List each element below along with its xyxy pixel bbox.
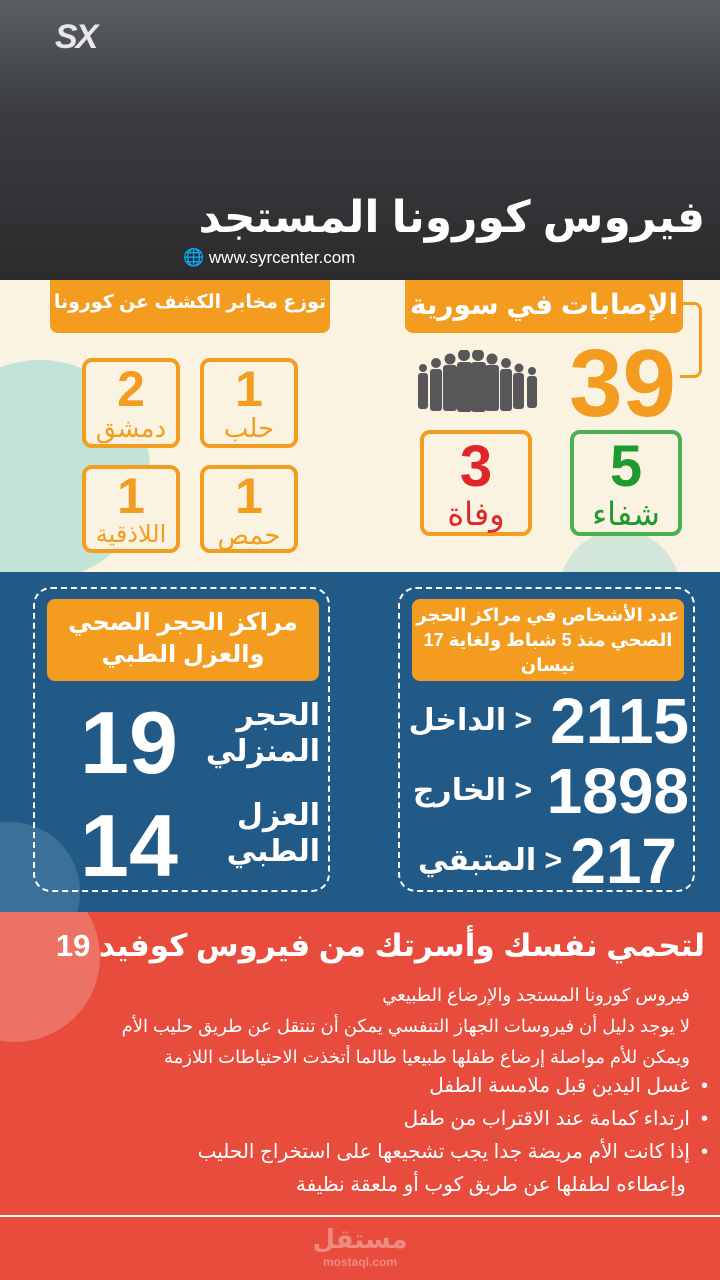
- row outside: [413, 755, 689, 827]
- box: latakia: اللاذقية: [96, 521, 166, 548]
- heading: الصحي منذ 5 شباط ولغاية 17: [424, 630, 672, 650]
- box: damascus: دمشق: [96, 413, 166, 443]
- bullet list: وإعطاءه لطفلها عن طريق كوب أو ملعقة نظيفة: [296, 1174, 686, 1196]
- bullet list: [198, 1075, 708, 1196]
- box: aleppo: [200, 358, 298, 448]
- medical isolation: 14: [80, 796, 178, 895]
- row outside: 1898: [547, 755, 689, 827]
- text block: ويمكن للأم مواصلة إرضاع طفلها طبيعيا طالما أتخذت الاحتياطات اللازمة: [164, 1047, 690, 1067]
- panel: quarantine centers: [33, 587, 330, 892]
- logo: SX: [55, 18, 96, 56]
- box: deaths: [420, 430, 532, 536]
- heading: لتحمي نفسك وأسرتك من فيروس كوفيد 19: [56, 928, 705, 963]
- virus decoration: [0, 822, 80, 962]
- box: recovered: [570, 430, 682, 536]
- bracket line: [680, 302, 702, 378]
- heading: [47, 599, 319, 681]
- box: deaths: 3: [460, 434, 492, 499]
- divider: [0, 1215, 720, 1217]
- panel: quarantine blue: [0, 572, 720, 912]
- heading: infections: [405, 280, 683, 333]
- box: recovered: شفاء: [592, 496, 660, 532]
- watermark: مستقل: [312, 1224, 408, 1254]
- box: deaths: وفاة: [447, 496, 505, 532]
- medical isolation: الطبي: [227, 835, 320, 868]
- heading: والعزل الطبي: [102, 641, 264, 668]
- box: latakia: 1: [117, 468, 145, 524]
- panel: protection tips: [0, 912, 720, 1280]
- heading: [412, 599, 684, 681]
- text block: لا يوجد دليل أن فيروسات الجهاز التنفسي يمكن أن تنتقل عن طريق حليب الأم: [122, 1016, 690, 1036]
- bullet list: • إذا كانت الأم مريضة جدا يجب تشجيعها على استخراج الحليب: [198, 1141, 708, 1163]
- home quarantine: [80, 693, 320, 792]
- row inside: < الداخل: [409, 704, 532, 737]
- row remaining: [418, 825, 677, 897]
- header photo: [0, 0, 720, 280]
- row remaining: 217: [570, 825, 677, 897]
- icon: people: [418, 350, 537, 412]
- watermark: [312, 1224, 408, 1269]
- box: aleppo: حلب: [224, 413, 274, 443]
- home quarantine: المنزلي: [206, 735, 320, 768]
- bullet list: • ارتداء كمامة عند الاقتراب من طفل: [404, 1108, 708, 1130]
- row inside: 2115: [550, 685, 689, 757]
- virus decoration: [0, 872, 100, 1042]
- row inside: [409, 685, 689, 757]
- box: recovered: 5: [610, 434, 642, 499]
- row outside: < الخارج: [413, 774, 532, 807]
- box: latakia: [82, 465, 180, 553]
- box: aleppo: 1: [235, 361, 263, 417]
- box: homs: حمص: [218, 520, 280, 550]
- title: فيروس كورونا المستجد: [198, 193, 705, 242]
- website url: 🌐 www.syrcenter.com: [183, 248, 355, 267]
- box: damascus: [82, 358, 180, 448]
- text block: فيروس كورونا المستجد والإرضاع الطبيعي: [382, 985, 690, 1005]
- panel: cream stats: [0, 280, 720, 572]
- virus decoration right: [560, 530, 680, 650]
- medical isolation: العزل: [237, 799, 320, 832]
- heading: labs: [50, 280, 330, 333]
- box: homs: [200, 465, 298, 553]
- home quarantine: 19: [80, 693, 178, 792]
- home quarantine: الحجر: [237, 699, 320, 732]
- box: damascus: 2: [117, 361, 145, 417]
- number 39: 39: [569, 330, 676, 437]
- text block: [122, 985, 690, 1068]
- virus decoration: [0, 360, 150, 580]
- heading: عدد الأشخاص في مراكز الحجر: [416, 605, 680, 625]
- bullet list: • غسل اليدين قبل ملامسة الطفل: [429, 1075, 708, 1097]
- row remaining: < المتبقي: [418, 844, 562, 877]
- watermark: mostaql.com: [323, 1255, 397, 1269]
- heading: labs: توزع مخابر الكشف عن كورونا: [54, 292, 326, 313]
- medical isolation: [80, 796, 320, 895]
- panel: people in quarantine: [398, 587, 695, 892]
- heading: نيسان: [521, 655, 575, 675]
- box: homs: 1: [235, 468, 263, 524]
- heading: مراكز الحجر الصحي: [68, 609, 298, 636]
- heading: infections: الإصابات في سورية: [410, 289, 678, 320]
